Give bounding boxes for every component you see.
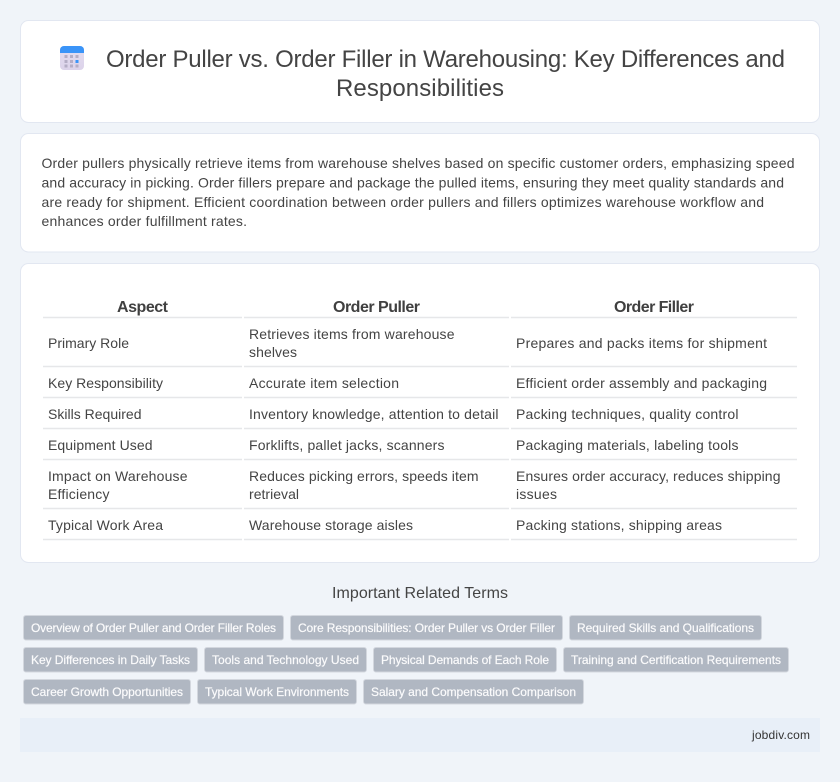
text block: summary paragraph: and accuracy in picking. Order fillers prepare and package the pulled items, ensuring they meet quality standards and	[42, 174, 784, 190]
tag: tools and technology: Tools and Technology Used	[212, 653, 359, 667]
row: typical work area: Warehouse storage aisles	[249, 517, 413, 533]
row: typical work area	[48, 517, 722, 533]
tag: career growth: Career Growth Opportunities	[31, 685, 183, 699]
tag: overview: Overview of Order Puller and Order Filler Roles	[31, 621, 276, 635]
tag: physical demands	[374, 648, 556, 672]
row: impact on warehouse efficiency: retrieval	[249, 486, 299, 502]
row: skills required	[48, 406, 738, 422]
row: key responsibility: Key Responsibility	[48, 375, 163, 391]
title: Order Puller vs. Order Filler in Warehousing: Key Differences and	[106, 46, 785, 73]
tag: core responsibilities: Core Responsibilities: Order Puller vs Order Filler	[298, 621, 555, 635]
row: impact on warehouse efficiency: Ensures order accuracy, reduces shipping	[516, 468, 780, 484]
tag: work environments: Typical Work Environments	[205, 685, 349, 699]
table header: Aspect	[117, 299, 169, 316]
title	[106, 46, 785, 102]
row: key responsibility: Accurate item selection	[249, 375, 399, 391]
tag: physical demands: Physical Demands of Each Role	[381, 653, 549, 667]
row: typical work area: Packing stations, shipping areas	[516, 517, 722, 533]
tag: training: Training and Certification Requirements	[571, 653, 781, 667]
row: key responsibility: Efficient order assembly and packaging	[516, 375, 767, 391]
row: impact on warehouse efficiency: issues	[516, 486, 557, 502]
tag: work environments	[198, 680, 356, 704]
row: equipment used	[48, 437, 738, 453]
tag: overview	[24, 616, 284, 640]
text block: summary paragraph: are ready for shipment. Efficient coordination between order pullers and fillers optimizes warehouse workflow and	[42, 194, 764, 210]
row: primary role	[48, 326, 767, 360]
row: primary role: Prepares and packs items for shipment	[516, 335, 767, 351]
text block: summary paragraph: Order pullers physically retrieve items from warehouse shelves based on specific customer orders, emphasizing speed	[42, 155, 794, 171]
heading: important related terms: Important Related Terms	[332, 585, 508, 602]
text block: summary paragraph: enhances order fulfillment rates.	[42, 213, 247, 229]
tag: career growth	[24, 680, 190, 704]
footer: jobdiv.com	[751, 728, 810, 742]
row: primary role: shelves	[249, 344, 297, 360]
row: typical work area: Typical Work Area	[48, 517, 163, 533]
row: key responsibility	[48, 375, 767, 391]
tag: required skills	[570, 616, 762, 640]
panel: introduction	[20, 134, 820, 252]
row: equipment used: Packaging materials, labeling tools	[516, 437, 738, 453]
row: skills required: Skills Required	[48, 406, 142, 422]
panel: title card	[20, 20, 820, 122]
row: skills required: Inventory knowledge, attention to detail	[249, 406, 498, 422]
tag: training	[564, 648, 788, 672]
tag: tools and technology	[204, 648, 366, 672]
row: impact on warehouse efficiency: Impact on Warehouse	[48, 468, 188, 484]
tag: core responsibilities	[290, 616, 562, 640]
icon: calendar	[60, 46, 84, 70]
table header: Order Filler	[614, 299, 694, 316]
tag group: related terms	[24, 616, 788, 704]
tag: key differences: Key Differences in Daily Tasks	[31, 653, 190, 667]
table header	[117, 299, 694, 316]
row: skills required: Packing techniques, quality control	[516, 406, 738, 422]
tag: required skills: Required Skills and Qualifications	[577, 621, 754, 635]
row: primary role: Primary Role	[48, 335, 129, 351]
panel: comparison table	[20, 264, 820, 562]
footer	[20, 718, 820, 752]
text block: summary paragraph	[42, 155, 794, 229]
row: impact on warehouse efficiency	[48, 468, 780, 502]
row: primary role: Retrieves items from warehouse	[249, 326, 455, 342]
tag: salary	[364, 680, 584, 704]
row: impact on warehouse efficiency: Reduces picking errors, speeds item	[249, 468, 478, 484]
title: Responsibilities	[336, 75, 504, 102]
table header: Order Puller	[333, 299, 420, 316]
row: equipment used: Forklifts, pallet jacks, scanners	[249, 437, 444, 453]
tag: salary: Salary and Compensation Comparison	[371, 685, 576, 699]
row: impact on warehouse efficiency: Efficiency	[48, 486, 110, 502]
row: equipment used: Equipment Used	[48, 437, 152, 453]
tag: key differences	[24, 648, 198, 672]
